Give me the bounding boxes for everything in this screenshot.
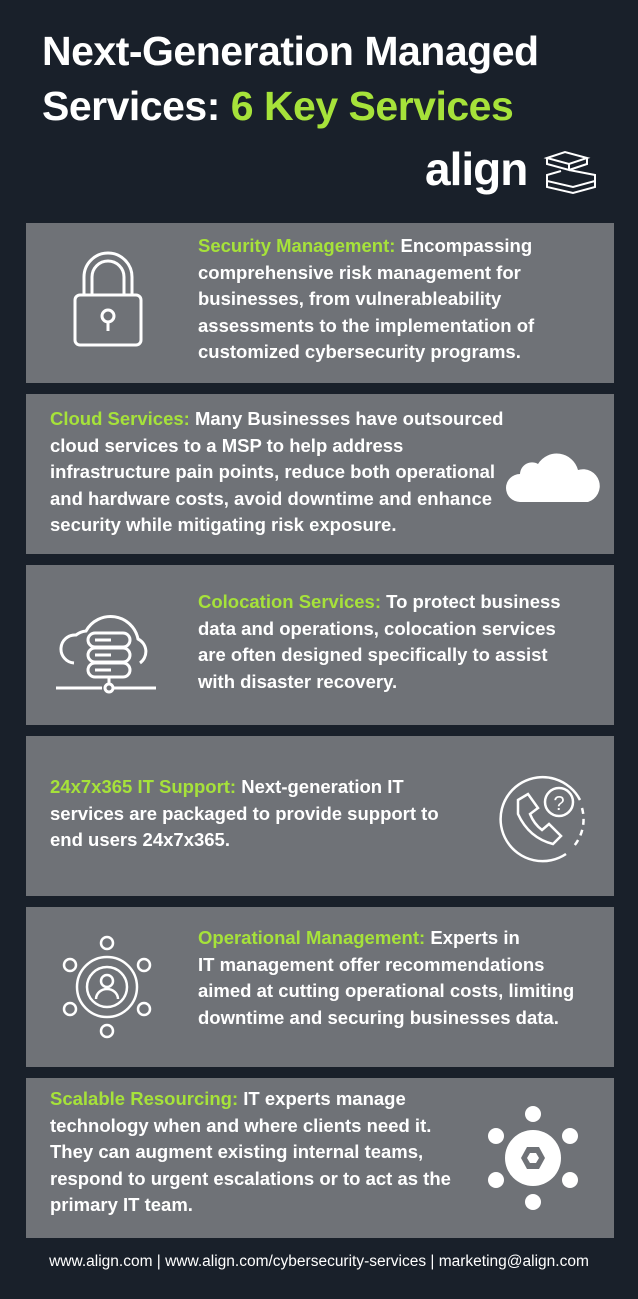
text: with disaster recovery. [198, 670, 397, 692]
icon: phone support: ? [553, 793, 565, 815]
text [198, 235, 534, 362]
text: services are packaged to provide support to [50, 802, 439, 824]
text: cloud services to a MSP to help address [50, 434, 403, 456]
text: and hardware costs, avoid downtime and enhance [50, 488, 492, 508]
title [42, 28, 539, 129]
panel: colocation services [26, 565, 614, 725]
text [198, 591, 561, 692]
text [198, 927, 574, 1028]
text: Colocation Services: To protect business [198, 591, 561, 612]
panel: cloud services [26, 394, 614, 554]
panel: IT support [26, 736, 614, 896]
text: Security Management: Encompassing [198, 235, 532, 256]
text: end users 24x7x365. [50, 829, 230, 850]
title: Services: 6 Key Services [42, 83, 513, 129]
text: Operational Management: Experts in [198, 927, 520, 948]
text: technology when and where clients need it. [50, 1114, 431, 1136]
footer: www.align.com | www.align.com/cybersecurity-services | marketing@align.com [49, 1253, 589, 1270]
icon: padlock [74, 252, 142, 346]
text: data and operations, colocation services [198, 618, 556, 638]
logo [425, 143, 596, 195]
icon: cloud [506, 454, 600, 502]
text: 24x7x365 IT Support: Next-generation IT [50, 776, 404, 797]
text [50, 776, 439, 850]
panel: scalable resourcing [26, 1078, 614, 1238]
text: comprehensive risk management for [198, 262, 521, 282]
text: security while mitigating risk exposure. [50, 514, 396, 535]
icon: phone support [499, 776, 585, 862]
text: infrastructure pain points, reduce both operational [50, 461, 495, 482]
text: IT management offer recommendations [198, 954, 544, 974]
icon: gear network [488, 1106, 578, 1210]
text: They can augment existing internal teams, [50, 1141, 423, 1162]
text [50, 408, 503, 535]
panel: security management [26, 223, 614, 383]
text: are often designed specifically to assist [198, 644, 548, 665]
text: Cloud Services: Many Businesses have outsourced [50, 408, 503, 429]
text: respond to urgent escalations or to act as the [50, 1168, 451, 1188]
text: businesses, from vulnerableability [198, 288, 501, 309]
text: primary IT team. [50, 1194, 193, 1215]
title: Next-Generation Managed [42, 28, 539, 74]
text: assessments to the implementation of [198, 314, 534, 336]
panel: operational management [26, 907, 614, 1067]
logo: align [425, 143, 527, 195]
text: customized cybersecurity programs. [198, 341, 521, 362]
text [50, 1088, 451, 1215]
icon: cloud server [56, 615, 156, 694]
text: downtime and securing businesses data. [198, 1006, 559, 1028]
text: Scalable Resourcing: IT experts manage [50, 1088, 406, 1109]
icon: network person [62, 936, 152, 1038]
text: aimed at cutting operational costs, limiting [198, 980, 574, 1001]
